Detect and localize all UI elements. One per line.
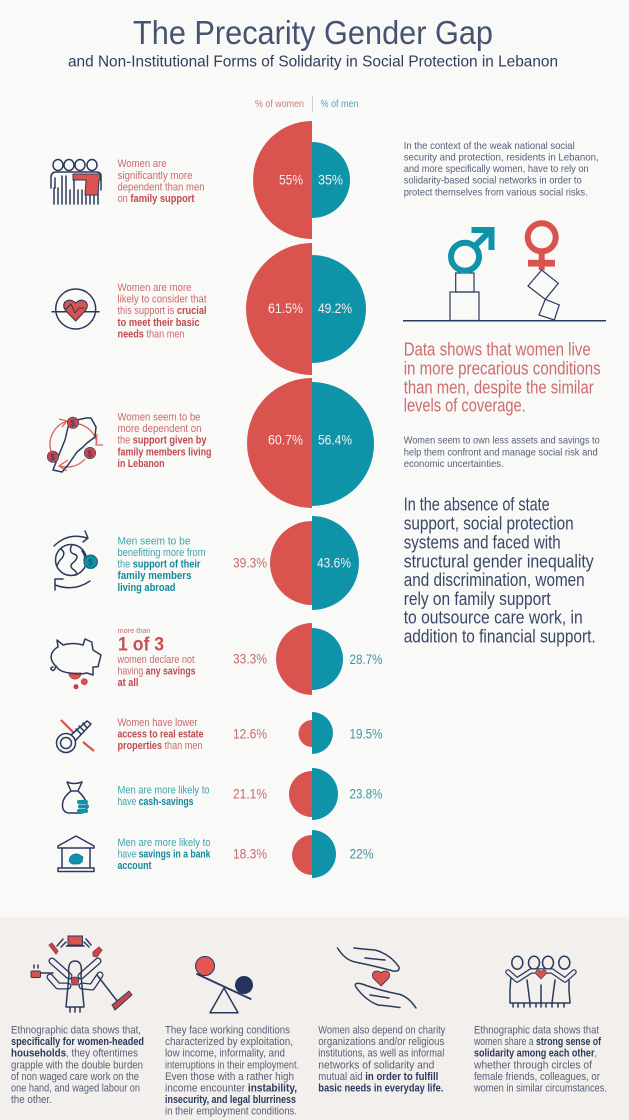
text: family abroad: Men seem to be xyxy=(118,536,191,548)
title: The Precarity Gender Gap xyxy=(133,14,493,51)
text: family in Lebanon: Women seem to be xyxy=(118,412,201,424)
text: family abroad: living abroad xyxy=(118,582,176,594)
text: solidarity among women: whether through circles of xyxy=(473,1059,592,1071)
text: no savings: having any savings xyxy=(118,666,196,678)
text: crucial support: likely to consider that xyxy=(118,294,207,306)
row: cash savings xyxy=(62,768,382,820)
text: absence of state support: In the absence of state xyxy=(404,494,550,515)
chart legend: % of men xyxy=(320,99,358,110)
text: context paragraph: security and protection, residents in Lebanon, xyxy=(404,153,599,164)
text: no savings: more than xyxy=(118,628,151,635)
text: family abroad xyxy=(118,536,206,594)
text: family in Lebanon: more dependent on xyxy=(118,423,202,435)
chart: 12.6% women, 19.5% men xyxy=(233,712,382,754)
text: no savings: 1 of 3 xyxy=(118,635,164,656)
text: assets and savings: economic uncertainties. xyxy=(404,459,504,470)
text: crucial support: needs than men xyxy=(118,328,185,340)
text: family abroad: family members xyxy=(118,570,192,582)
text: assets and savings: Women seem to own less assets and savings to xyxy=(404,436,600,447)
chart: 61.5% women, 49.2% men xyxy=(246,243,366,375)
text: working conditions xyxy=(165,1024,299,1118)
icon: family group xyxy=(51,160,101,204)
text: charity and mutual aid: institutions, as well as informal xyxy=(318,1048,444,1060)
text: family support: dependent than men xyxy=(118,181,205,193)
chart: 61.5% women, 49.2% men: 61.5% xyxy=(268,300,303,316)
icon: bank with piggy xyxy=(58,836,94,872)
text: context paragraph xyxy=(404,141,599,198)
text: charity and mutual aid: organizations and/or religious xyxy=(318,1036,444,1048)
text: family support: Women are xyxy=(118,158,167,170)
row: family abroad xyxy=(54,516,359,610)
panel: ethnographic findings xyxy=(0,917,629,1120)
text: family in Lebanon: the support given by xyxy=(118,435,207,447)
text: working conditions: Even those with a rather high xyxy=(165,1071,294,1083)
callout: precarious conditions: Data shows that women live xyxy=(404,339,591,360)
text: solidarity among women: solidarity among each other, xyxy=(474,1048,597,1060)
chart: 18.3% women, 22% men xyxy=(233,830,374,878)
text: working conditions: low income, informality, and xyxy=(165,1048,285,1060)
text: family support: significantly more xyxy=(118,170,193,182)
chart: 39.3% women, 43.6% men: 43.6% xyxy=(317,554,351,570)
text: no savings: women declare not xyxy=(117,654,195,666)
text: charity and mutual aid: networks of solidarity and xyxy=(318,1059,434,1071)
chart: 21.1% women, 23.8% men xyxy=(233,768,382,820)
row: bank savings xyxy=(58,830,374,878)
icon: woman juggling tasks xyxy=(31,936,132,1012)
illustration: male and female symbols on stacked blocks xyxy=(403,223,606,322)
text: working conditions: characterized by exploitation, xyxy=(165,1036,293,1048)
text: absence of state support: addition to financial support. xyxy=(404,625,596,646)
icon: piggy bank xyxy=(51,639,101,689)
text: absence of state support: rely on family support xyxy=(404,588,551,609)
chart: 33.3% women, 28.7% men xyxy=(233,623,382,695)
chart: 18.3% women, 22% men: 22% xyxy=(350,846,374,862)
text: solidarity among women: Ethnographic data shows that xyxy=(474,1024,599,1036)
text: real estate: Women have lower xyxy=(118,717,198,729)
text: women-headed households xyxy=(11,1024,144,1106)
chart: 60.7% women, 56.4% men: 60.7% xyxy=(268,432,303,448)
text: context paragraph: solidarity-based social networks in order to xyxy=(404,176,582,187)
chart: 21.1% women, 23.8% men: 23.8% xyxy=(350,786,382,802)
text: solidarity among women xyxy=(473,1024,607,1094)
chart: 60.7% women, 56.4% men xyxy=(247,378,374,508)
text: absence of state support: and discrimination, women xyxy=(404,569,585,590)
text: women-headed households: grapple with the double burden xyxy=(11,1059,143,1071)
text: family in Lebanon: family members living xyxy=(118,446,212,458)
text: crucial support: to meet their basic xyxy=(118,317,200,329)
text: no savings xyxy=(117,628,196,689)
chart: 33.3% women, 28.7% men: 28.7% xyxy=(350,651,382,667)
text: solidarity among women: female friends, colleagues, or xyxy=(474,1071,600,1083)
callout: precarious conditions: levels of coverage. xyxy=(404,395,526,416)
text: crucial support: Women are more xyxy=(118,282,192,294)
text: working conditions: in their employment conditions. xyxy=(165,1106,297,1118)
text: crucial support: this support is crucial xyxy=(118,305,207,317)
text: women-headed households: of non waged care work on the xyxy=(11,1071,139,1083)
chart: 55% women, 35% men: 55% xyxy=(279,172,303,188)
chart legend xyxy=(255,96,358,112)
chart: 61.5% women, 49.2% men: 49.2% xyxy=(318,300,352,316)
text: cash savings: have cash-savings xyxy=(118,796,194,808)
chart: 18.3% women, 22% men: 18.3% xyxy=(233,846,267,862)
text: no savings: at all xyxy=(118,677,139,689)
text: context paragraph: and more specifically women, have to rely on xyxy=(404,164,589,175)
icon: globe with arrows xyxy=(54,531,97,590)
chart: 60.7% women, 56.4% men: 56.4% xyxy=(318,432,352,448)
text: absence of state support: systems and faced with xyxy=(404,531,561,552)
icon: Lebanon map with money cycle: $ xyxy=(88,449,92,458)
subtitle: and Non-Institutional Forms of Solidarity in Social Protection in Lebanon xyxy=(68,54,558,71)
text: charity and mutual aid: Women also depend on charity xyxy=(318,1024,446,1036)
row: real estate xyxy=(56,712,382,754)
text: women-headed households: specifically for women-headed xyxy=(11,1036,144,1048)
chart: 33.3% women, 28.7% men: 33.3% xyxy=(233,650,267,666)
chart: 12.6% women, 19.5% men: 19.5% xyxy=(350,726,382,742)
text: family support xyxy=(118,158,205,205)
icon: money bag xyxy=(62,782,89,813)
text: bank savings: account xyxy=(118,860,152,872)
text: real estate xyxy=(118,717,204,752)
icon: Lebanon map with money cycle: $ xyxy=(50,453,56,462)
text: charity and mutual aid: mutual aid in order to fulfill xyxy=(318,1071,438,1083)
chart: 39.3% women, 43.6% men xyxy=(233,516,359,610)
text: family support: on family support xyxy=(118,193,195,205)
icon: hands holding heart xyxy=(338,948,416,1008)
text: crucial support xyxy=(118,282,207,340)
icon: unbalanced seesaw xyxy=(196,956,253,1013)
chart: 55% women, 35% men xyxy=(253,121,350,239)
icon: Lebanon map with money cycle xyxy=(47,417,103,472)
icon: crossed key xyxy=(56,720,94,752)
text: bank savings: Men are more likely to xyxy=(118,837,211,849)
text: working conditions: interruptions in their employment. xyxy=(165,1059,299,1071)
text: absence of state support xyxy=(404,494,596,646)
text: context paragraph: protect themselves from various social risks. xyxy=(404,187,588,198)
text: cash savings xyxy=(118,784,210,808)
text: charity and mutual aid xyxy=(318,1024,446,1094)
text: context paragraph: In the context of the weak national social xyxy=(404,141,575,152)
text: absence of state support: support, social protection xyxy=(404,512,574,533)
text: real estate: properties than men xyxy=(118,740,203,752)
text: assets and savings: help them confront and manage social risk and xyxy=(404,448,598,458)
text: absence of state support: to outsource care work, in xyxy=(404,607,583,628)
text: family in Lebanon xyxy=(118,412,212,470)
icon: Lebanon map with money cycle: $ xyxy=(70,419,76,428)
chart: 39.3% women, 43.6% men: 39.3% xyxy=(233,554,267,570)
text: women-headed households: the other. xyxy=(11,1094,52,1106)
icon: heart in circle xyxy=(52,289,99,329)
text: working conditions: They face working conditions xyxy=(165,1024,290,1036)
chart: 21.1% women, 23.8% men: 21.1% xyxy=(233,786,267,802)
text: assets and savings xyxy=(404,436,600,470)
row: crucial support xyxy=(52,243,366,375)
text: working conditions: income encounter instability, xyxy=(165,1082,297,1094)
text: charity and mutual aid: basic needs in everyday life. xyxy=(318,1082,443,1094)
icon: women embracing xyxy=(508,956,574,1007)
row: no savings xyxy=(51,623,382,695)
text: bank savings xyxy=(118,837,211,872)
chart legend: % of women xyxy=(255,99,304,110)
icon: globe with arrows: $ xyxy=(88,557,93,567)
chart: 55% women, 35% men: 35% xyxy=(318,172,343,188)
text: solidarity among women: women share a strong sense of xyxy=(473,1036,601,1048)
text: family in Lebanon: in Lebanon xyxy=(118,458,164,470)
text: family abroad: benefitting more from xyxy=(118,547,206,559)
text: family abroad: the support of their xyxy=(118,559,200,571)
text: women-headed households: Ethnographic data shows that, xyxy=(11,1024,141,1036)
chart: 12.6% women, 19.5% men: 12.6% xyxy=(233,726,267,742)
text: absence of state support: structural gender inequality xyxy=(404,550,594,571)
text: working conditions: insecurity, and legal blurriness xyxy=(165,1094,296,1106)
text: women-headed households: households, they oftentimes xyxy=(11,1048,138,1060)
row: family in Lebanon xyxy=(47,378,374,508)
text: cash savings: Men are more likely to xyxy=(118,784,210,796)
text: solidarity among women: women in similar circumstances. xyxy=(473,1082,607,1094)
text: real estate: access to real estate xyxy=(118,729,204,741)
row: family support xyxy=(51,121,350,239)
text: women-headed households: one hand, and waged labour on xyxy=(11,1082,140,1094)
callout: precarious conditions xyxy=(404,339,601,416)
text: bank savings: have savings in a bank xyxy=(118,849,211,861)
